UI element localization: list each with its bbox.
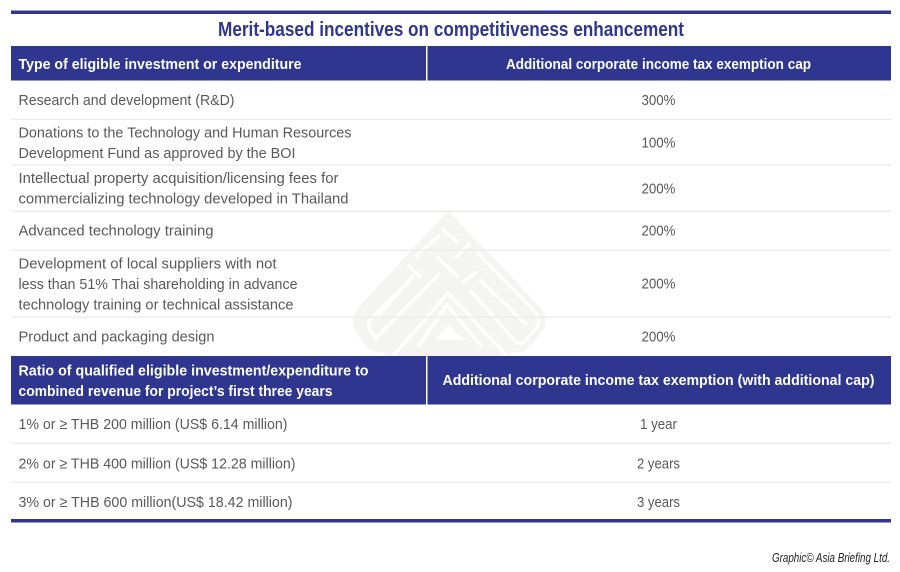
row: 1 percent	[18, 416, 677, 433]
row: R&D	[18, 92, 676, 109]
header row 1	[11, 46, 891, 80]
row: donations: Development Fund as approved by the BOI	[18, 145, 296, 162]
row: 3 percent	[18, 494, 680, 511]
row: intellectual property: Intellectual property acquisition/licensing fees for	[18, 170, 338, 187]
row: 3 percent: 3% or ≥ THB 600 million(US$ 18.42 million)	[18, 494, 293, 511]
row: local suppliers: technology training or technical assistance	[18, 296, 294, 314]
row: advanced technology training	[18, 222, 676, 240]
row: donations: Donations to the Technology and Human Resources	[18, 124, 352, 142]
row: R&D: 300%	[642, 92, 676, 109]
row: R&D: Research and development (R&D)	[18, 92, 235, 109]
row: 3 percent: 3 years	[637, 494, 680, 511]
row: local suppliers: Development of local suppliers with not	[18, 256, 277, 272]
row: donations: 100%	[642, 134, 676, 152]
row: local suppliers	[18, 256, 676, 314]
header row 2: combined revenue for project’s first three years	[18, 383, 332, 400]
row dividers	[11, 118, 891, 483]
row: 2 percent: 2 years	[637, 456, 680, 472]
row: local suppliers: 200%	[642, 276, 676, 292]
row: advanced technology training: Advanced technology training	[18, 222, 214, 240]
title: Merit-based incentives on competitiveness enhancement	[218, 19, 684, 41]
row: advanced technology training: 200%	[642, 222, 676, 240]
bottom rule	[11, 519, 891, 522]
row: intellectual property	[18, 170, 676, 208]
row: intellectual property: 200%	[642, 180, 676, 198]
row: 1 percent: 1 year	[640, 416, 677, 433]
header row 1: Type of eligible investment or expenditure	[18, 56, 302, 73]
row: product and packaging design: Product and packaging design	[18, 328, 214, 346]
row: local suppliers: less than 51% Thai shareholding in advance	[18, 276, 298, 293]
header row 1: Additional corporate income tax exemption cap	[506, 56, 811, 73]
header row 2: Ratio of qualified eligible investment/expenditure to	[18, 362, 368, 380]
row: product and packaging design	[18, 328, 676, 346]
row: 2 percent	[18, 456, 680, 472]
row: intellectual property: commercializing technology developed in Thailand	[18, 190, 348, 208]
header row 2	[11, 356, 891, 404]
row: 1 percent: 1% or ≥ THB 200 million (US$ 6.14 million)	[18, 416, 288, 433]
top rule	[11, 10, 891, 14]
row: 2 percent: 2% or ≥ THB 400 million (US$ 12.28 million)	[18, 456, 296, 472]
row: product and packaging design: 200%	[642, 328, 676, 346]
watermark logo	[353, 211, 546, 360]
row: donations	[18, 124, 676, 162]
header row 2: Additional corporate income tax exemption (with additional cap)	[442, 372, 874, 389]
